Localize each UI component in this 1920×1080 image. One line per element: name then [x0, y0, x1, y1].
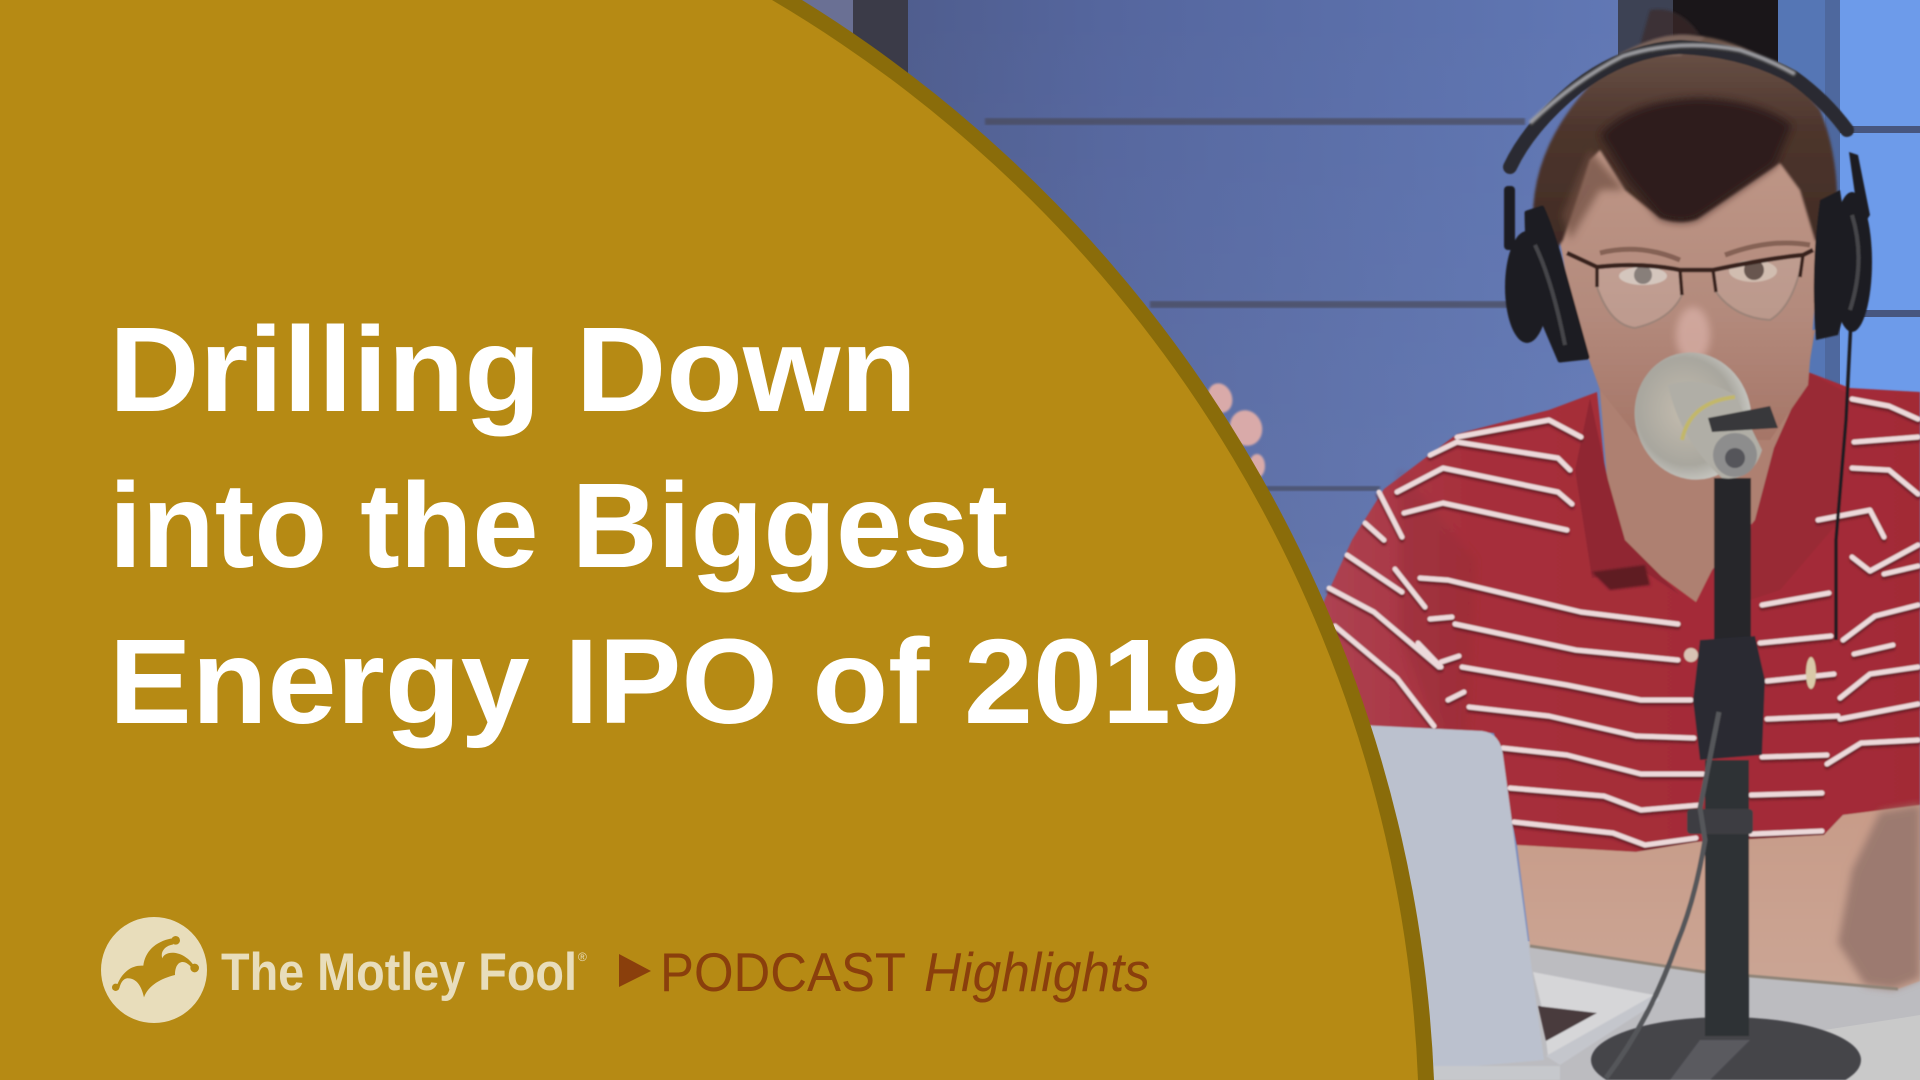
- shock grip: [1693, 636, 1765, 760]
- eyes: [1600, 243, 1810, 285]
- mic stand: [1591, 478, 1861, 1080]
- microphone: [1620, 339, 1778, 493]
- stand base: [1591, 1017, 1861, 1080]
- red striped polo shirt: [1320, 372, 1920, 852]
- shirt stripes: [1329, 399, 1918, 845]
- right ear cup: [1814, 152, 1872, 340]
- nose highlight: [1676, 307, 1710, 363]
- laptop: [1360, 725, 1660, 1080]
- brand name: ®: [578, 950, 587, 964]
- icon: play arrow: [619, 954, 651, 987]
- table: [1420, 940, 1920, 1080]
- face and head: [1533, 9, 1837, 440]
- glasses: [1567, 250, 1813, 328]
- headphone cable: [1836, 320, 1851, 640]
- headphones: [1504, 45, 1872, 360]
- left ear cup: [1504, 186, 1587, 360]
- pole: [1705, 760, 1749, 1036]
- shirt logo: [1806, 657, 1816, 689]
- stand clutch: [1687, 809, 1753, 834]
- icon: Motley Fool jester logo: [101, 917, 207, 1023]
- shirt button: [1684, 648, 1698, 662]
- title: into the Biggest: [109, 457, 1008, 593]
- title: Energy IPO of 2019: [109, 613, 1240, 749]
- studio background panels: [760, 0, 1920, 1080]
- mic cable: [1606, 712, 1719, 1078]
- brand name: The Motley Fool: [221, 943, 577, 1002]
- podcast label: Highlights: [924, 941, 1150, 1003]
- panel: gold title semicircle: [0, 0, 1434, 1080]
- host figure: [1320, 9, 1920, 1080]
- photo: podcast host at microphone: [760, 0, 1920, 1080]
- hand behind the panel edge: [1204, 380, 1267, 478]
- neck: [1595, 330, 1815, 605]
- podcast label: PODCAST: [660, 941, 906, 1003]
- title: Drilling Down: [109, 301, 917, 437]
- podcast label: [660, 941, 1150, 1003]
- title: [109, 301, 1240, 749]
- forearm: [1517, 805, 1920, 989]
- hair: [1533, 9, 1837, 262]
